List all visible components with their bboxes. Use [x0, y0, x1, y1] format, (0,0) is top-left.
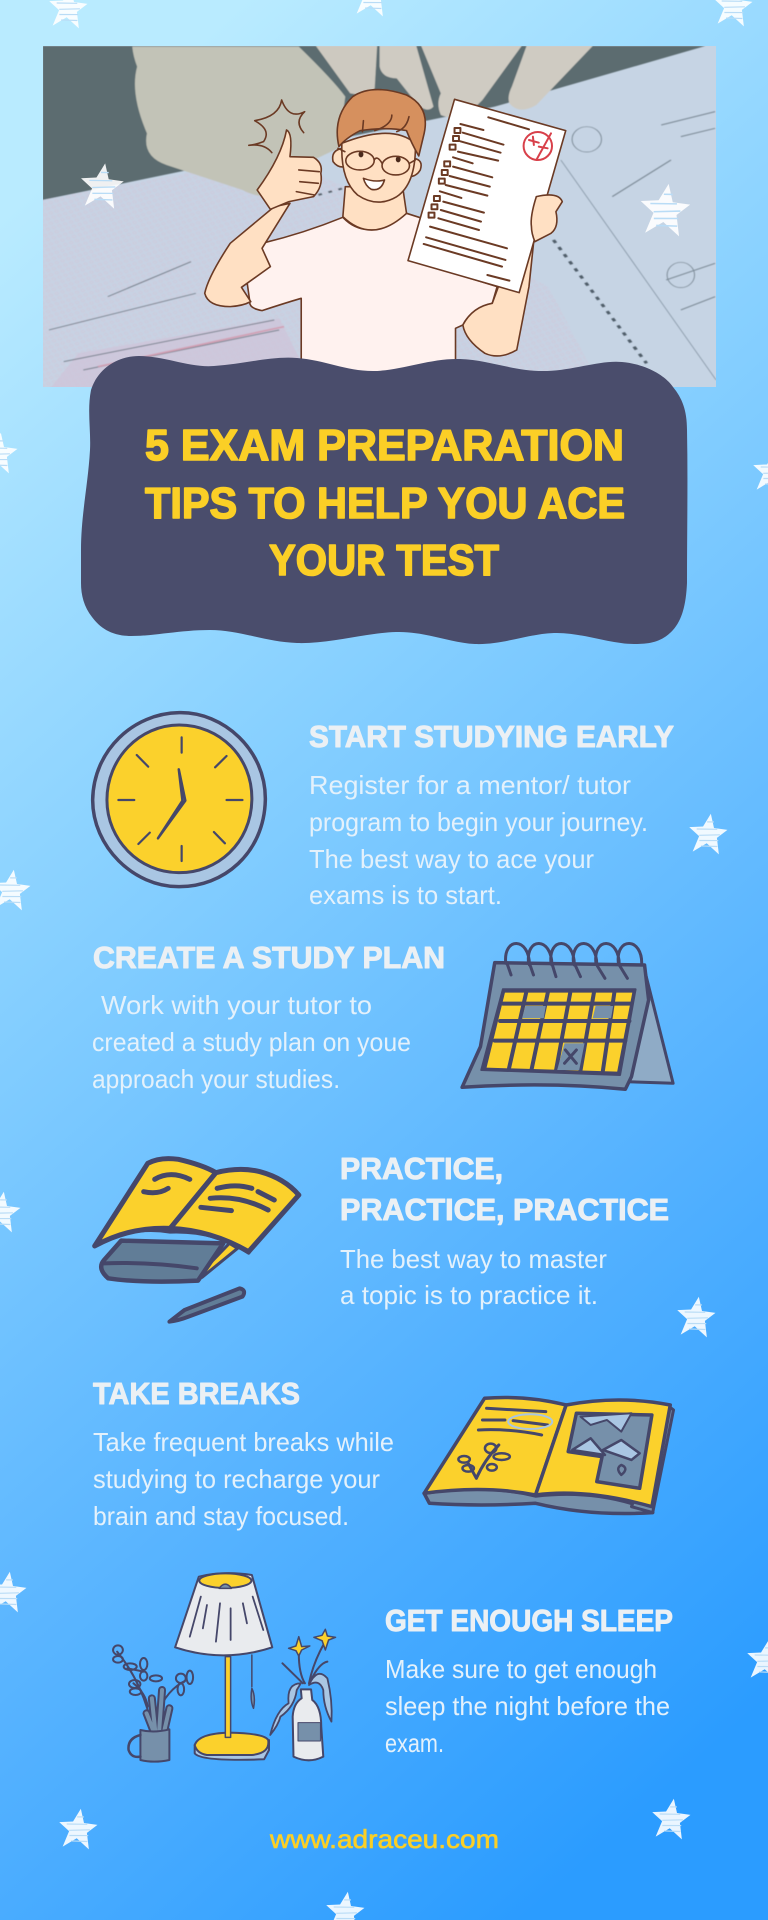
vase ribbons — [270, 1683, 301, 1735]
burst lines near thumb — [249, 100, 305, 153]
text block: get enough sleep: sleep the night before the — [385, 1691, 670, 1721]
glasses — [338, 148, 415, 175]
title text: TIPS TO HELP YOU ACE — [145, 479, 625, 528]
mug with pens — [147, 1690, 169, 1730]
pull cord — [251, 1655, 254, 1708]
title text: 5 EXAM PREPARATION — [145, 421, 624, 470]
text block: start studying early: START STUDYING EARLY — [309, 719, 674, 754]
icon: desk calendar — [462, 944, 673, 1089]
text block: get enough sleep: exam. — [385, 1728, 444, 1758]
star on photo left — [77, 160, 126, 211]
paper lines and checkboxes — [424, 117, 529, 281]
right hand fingers — [531, 195, 562, 242]
text block: take breaks: Take frequent breaks while — [93, 1427, 394, 1457]
text block: get enough sleep: GET ENOUGH SLEEP — [385, 1603, 673, 1638]
text block: create a study plan — [92, 940, 445, 1094]
text block: take breaks: TAKE BREAKS — [93, 1376, 300, 1411]
mouth — [363, 178, 384, 190]
test paper — [408, 99, 566, 293]
text block: practice, practice, practice: PRACTICE, — [340, 1151, 503, 1186]
website url: www.adraceu.com — [269, 1824, 499, 1854]
lamp pole — [225, 1657, 231, 1737]
icon: wall clock — [93, 713, 265, 887]
neck — [343, 187, 407, 230]
text block: create a study plan: Work with your tutor to — [101, 990, 372, 1020]
text block: create a study plan: CREATE A STUDY PLAN — [93, 940, 445, 975]
text block: practice, practice, practice: PRACTICE, PRACTICE — [340, 1192, 669, 1227]
title text — [145, 421, 625, 585]
face — [342, 133, 415, 202]
thumbs-up fist — [257, 130, 321, 209]
text block: start studying early: exams is to start. — [309, 880, 502, 910]
right arm — [463, 240, 534, 356]
star on photo right — [636, 180, 693, 238]
text block: practice, practice, practice: a topic is to practice it. — [340, 1280, 598, 1310]
text block: practice, practice, practice — [340, 1151, 669, 1310]
title text: YOUR TEST — [269, 536, 499, 585]
text block: create a study plan: created a study plan on youe — [92, 1027, 411, 1057]
plant sprigs — [117, 1652, 187, 1713]
flowers — [282, 1645, 327, 1683]
text block: create a study plan: approach your studies. — [92, 1064, 340, 1094]
lamp shade — [175, 1573, 272, 1655]
illustration: student holding test paper with thumbs up — [205, 90, 566, 373]
text block: take breaks: brain and stay focused. — [93, 1501, 349, 1531]
text block: start studying early: Register for a mentor/ tutor — [309, 770, 631, 800]
ears — [333, 148, 421, 177]
title banner shape — [81, 356, 687, 644]
vase — [293, 1689, 323, 1760]
text block: start studying early: program to begin your journey. — [309, 807, 648, 837]
text block: get enough sleep — [385, 1603, 673, 1758]
hero photo: exam answer sheet — [43, 46, 716, 390]
icon: open sketchbook — [424, 1397, 674, 1514]
icon: open book on closed book with pen — [95, 1159, 299, 1322]
icon: table lamp with plant and vase — [113, 1573, 336, 1762]
red grade mark — [524, 132, 552, 160]
hair — [337, 90, 425, 156]
text block: take breaks — [93, 1376, 394, 1531]
left arm — [205, 203, 290, 307]
text block: start studying early: The best way to ace your — [309, 844, 594, 874]
t-shirt — [245, 213, 497, 373]
text block: get enough sleep: Make sure to get enough — [385, 1654, 657, 1684]
text block: practice, practice, practice: The best way to master — [340, 1244, 607, 1274]
text block: take breaks: studying to recharge your — [93, 1464, 380, 1494]
lamp base — [195, 1740, 269, 1760]
eyes — [359, 151, 401, 162]
text block: start studying early — [309, 719, 674, 910]
